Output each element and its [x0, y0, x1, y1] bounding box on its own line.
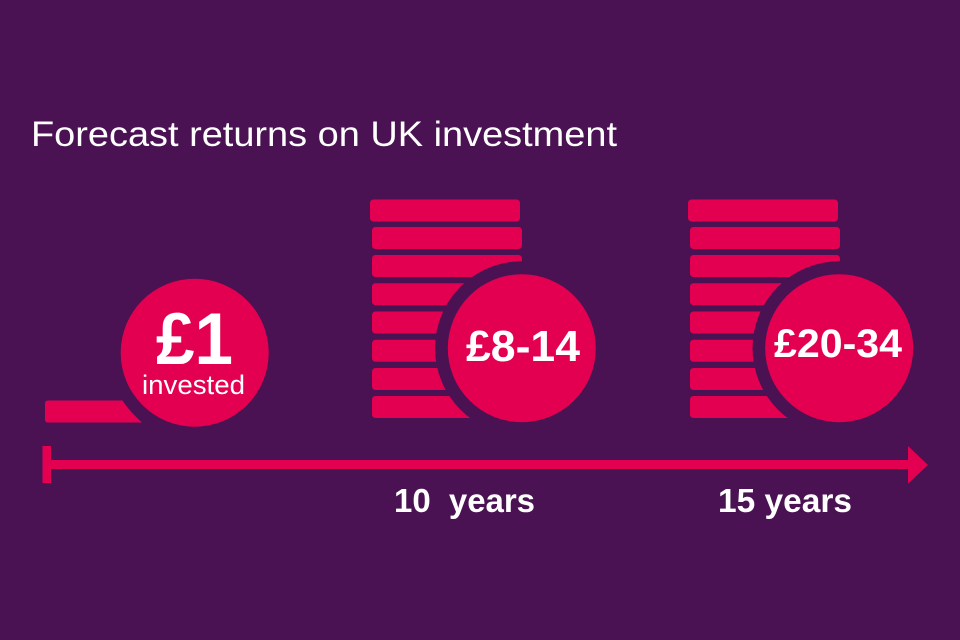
- icon: coin stack: [370, 200, 522, 418]
- label: invested: invested: [142, 370, 245, 400]
- value: £20-34: £20-34: [774, 322, 903, 366]
- icon: coin cutout: [435, 261, 609, 435]
- title: Forecast returns on UK investment: [31, 115, 617, 154]
- label: 10 years: 10 years: [394, 482, 535, 519]
- icon: £1 circle: [121, 279, 269, 427]
- arrow: timeline: [42, 446, 928, 484]
- icon: single coin bar: [45, 400, 142, 422]
- icon: coin stack: [688, 200, 840, 418]
- panel: 10 years stack: [370, 200, 609, 435]
- label: 15 years: 15 years: [718, 482, 852, 519]
- icon: coin cutout: [752, 261, 926, 435]
- panel: £1 invested: [45, 279, 269, 427]
- panel: 15 years stack: [688, 200, 926, 435]
- value: £1: £1: [156, 299, 233, 380]
- icon: value circle: [448, 274, 596, 422]
- icon: value circle: [765, 274, 913, 422]
- value: £8-14: £8-14: [466, 322, 581, 371]
